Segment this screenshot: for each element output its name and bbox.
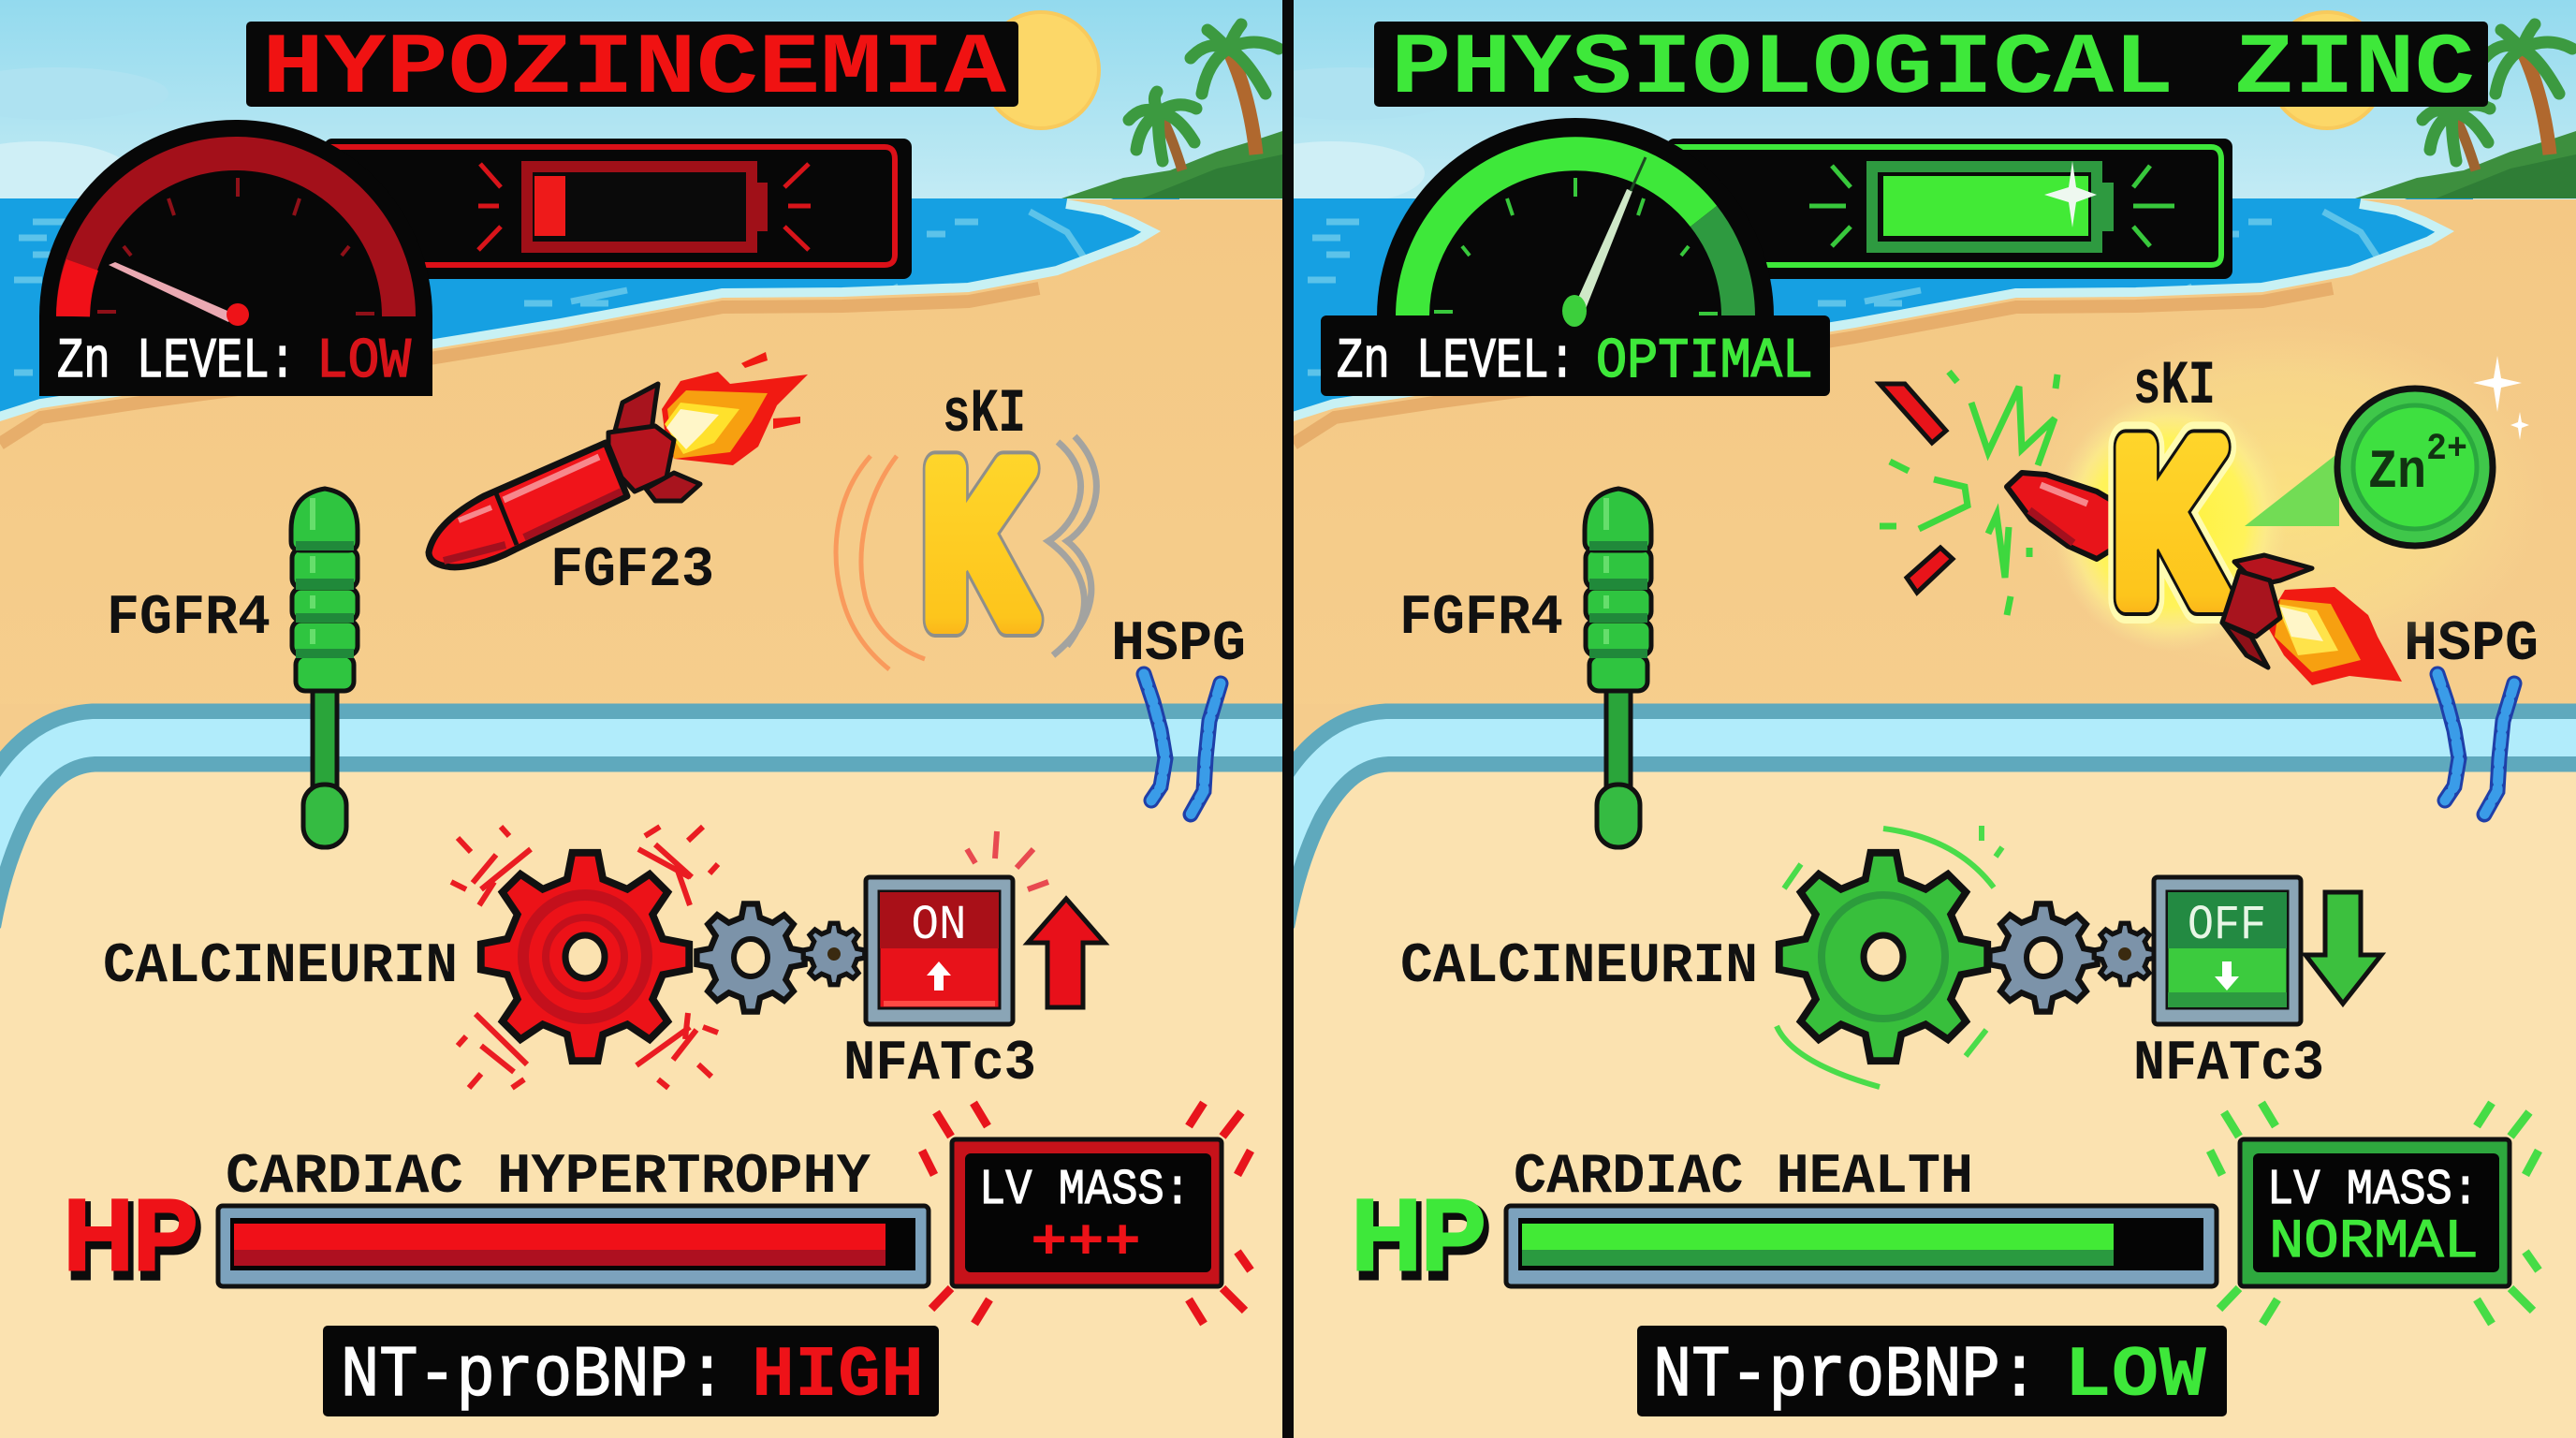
- label: HSPG: HSPG: [1111, 613, 1246, 677]
- status panel: battery full: [1666, 139, 2232, 279]
- callout: LV mass normal: NORMAL: [2269, 1212, 2479, 1273]
- callout: NT-proBNP low: LOW: [2064, 1336, 2207, 1417]
- glow behind K and zinc: [2022, 318, 2546, 674]
- icon: sun: [983, 12, 1099, 128]
- label: HP: HP: [67, 1182, 201, 1299]
- callout: LV mass high: LV MASS:: [979, 1162, 1191, 1218]
- gauge: zinc level optimal: [1321, 118, 1830, 396]
- label: FGFR4: FGFR4: [1399, 587, 1563, 651]
- rocket body: [429, 443, 627, 567]
- callout: NT-proBNP high: [323, 1326, 939, 1417]
- icon: empty battery: [478, 164, 811, 250]
- title: hypozincemia: HYPOZINCEMIA: [262, 20, 1007, 118]
- gauge needle: [1562, 157, 1646, 327]
- label: HP: HP: [1355, 1182, 1489, 1299]
- icon: sKI letter K glowing: [2115, 399, 2224, 645]
- icon: FGF23 rocket: [429, 352, 808, 567]
- gauge: zinc level low: LOW: [316, 330, 411, 394]
- callout: NT-proBNP high: HIGH: [752, 1336, 924, 1417]
- icon: sKI letter K glowing: K: [2115, 399, 2224, 645]
- label: zn level optimal: OPTIMAL: [1596, 330, 1813, 394]
- icon: grey linkage gears: [696, 903, 865, 1012]
- gauge: zinc level low: [39, 120, 432, 396]
- rocket fins and tail: [608, 384, 700, 501]
- callout: NT-proBNP low: NT-proBNP:: [1653, 1336, 2039, 1417]
- label: zn level optimal: Zn LEVEL:: [1337, 330, 1575, 394]
- label: HSPG: HSPG: [2404, 613, 2539, 677]
- callout: LV mass high: +++: [1031, 1212, 1141, 1276]
- rocket flame: [662, 352, 808, 465]
- icon: NFATc3 switch off: OFF: [2188, 898, 2266, 953]
- icon: active calcineurin gear: [451, 827, 718, 1088]
- arrow: up: [1028, 899, 1105, 1007]
- icon: calm calcineurin gear: [1777, 826, 2002, 1087]
- icon: sparkles: [2473, 356, 2529, 440]
- label: zn level optimal: [1321, 315, 1830, 396]
- label: zn level low: Zn LEVEL:: [57, 330, 296, 394]
- label: sKI: sKI: [2133, 351, 2216, 421]
- arrow: down: [2305, 892, 2381, 1004]
- rocket tail and flame: [2222, 555, 2402, 685]
- icon: sKI letter K with motion lines: K: [925, 420, 1033, 667]
- icon: zinc ion coin: [2337, 389, 2493, 546]
- bar: cardiac hypertrophy HP: [218, 1206, 929, 1286]
- icon: NFATc3 switch on: ON: [912, 898, 966, 953]
- callout: LV mass high: [922, 1103, 1251, 1324]
- label: CALCINEURIN: CALCINEURIN: [103, 935, 458, 999]
- callout: NT-proBNP low: [1637, 1326, 2227, 1417]
- callout: LV mass normal: [2210, 1103, 2539, 1324]
- icon: grey linkage gears: [1989, 903, 2156, 1012]
- beam: zinc to K: [2245, 452, 2339, 526]
- label: FGF23: FGF23: [550, 539, 714, 603]
- panel: physiological zinc: [1321, 12, 2546, 1417]
- label: FGFR4: FGFR4: [107, 587, 271, 651]
- callout: NT-proBNP high: NT-proBNP:: [341, 1336, 726, 1417]
- panel: hypozincemia: [39, 12, 1251, 1417]
- icon: shattered rocket fragments and sparks: [1880, 372, 2057, 615]
- panel: hypozincemia beach background: [0, 0, 1292, 1438]
- icon: zinc ion coin: Zn: [2368, 443, 2426, 504]
- icon: sKI letter K with motion lines: K: [925, 420, 1033, 667]
- label: sKI: sKI: [943, 379, 1026, 449]
- label: CALCINEURIN: CALCINEURIN: [1400, 935, 1758, 999]
- icon: FGF23 rocket blocked by K: [2007, 473, 2153, 559]
- icon: NFATc3 switch on: [866, 831, 1048, 1024]
- icon: NFATc3 switch off: [2154, 877, 2301, 1024]
- panel: physiological zinc beach background: [1237, 0, 2576, 1438]
- label: NFATc3: NFATc3: [2133, 1033, 2324, 1096]
- label: cardiac health: CARDIAC HEALTH: [1514, 1146, 1973, 1210]
- icon: sKI letter K glowing: K: [2115, 399, 2224, 645]
- icon: sKI letter K with motion lines: [836, 420, 1096, 669]
- label: NFATc3: NFATc3: [843, 1033, 1036, 1096]
- centre divider: [1282, 0, 1294, 1438]
- icon: full battery: [1809, 161, 2174, 247]
- label: cardiac hypertrophy: CARDIAC HYPERTROPHY: [226, 1146, 871, 1210]
- icon: sun: [2269, 12, 2385, 128]
- label: HP: HP: [64, 1178, 198, 1291]
- icon: sKI letter K glowing: K: [2115, 399, 2224, 645]
- icon: zinc ion coin: 2+: [2426, 429, 2467, 471]
- callout: LV mass normal: LV MASS:: [2267, 1162, 2479, 1218]
- title: physiological zinc: PHYSIOLOGICAL ZINC: [1391, 20, 2475, 118]
- status panel: battery low: [324, 139, 912, 279]
- bar: cardiac health HP: [1506, 1206, 2217, 1286]
- label: HP: HP: [1352, 1178, 1486, 1291]
- gauge needle: [109, 262, 249, 326]
